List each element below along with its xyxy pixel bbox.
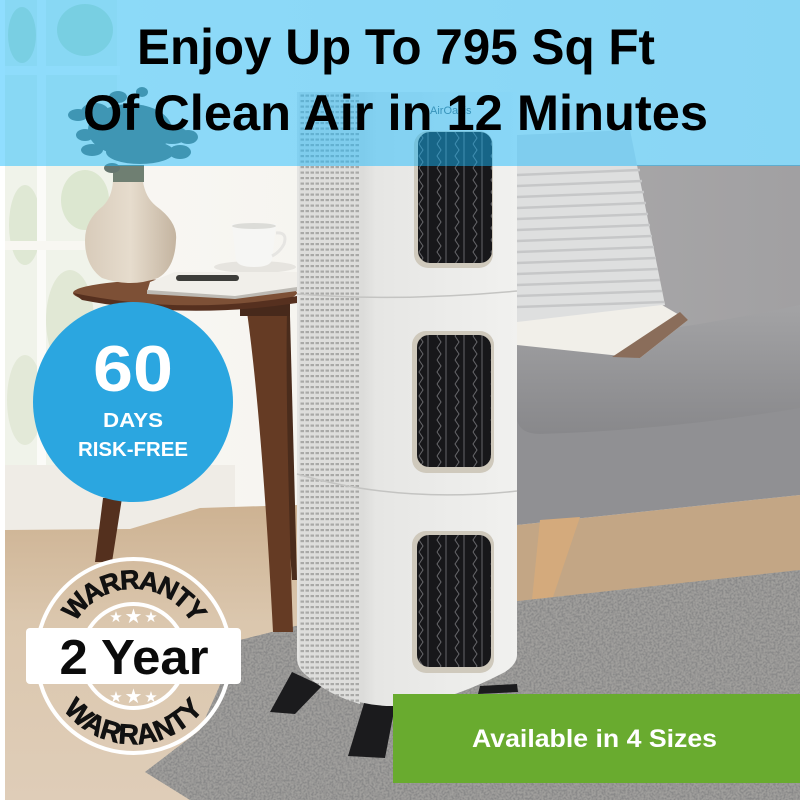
stars xyxy=(109,606,158,708)
stars: ★ xyxy=(109,609,123,626)
brand mark: AirOasis xyxy=(430,105,472,117)
title: Of Clean Air in 12 Minutes xyxy=(83,85,708,141)
book and pen xyxy=(147,272,297,299)
2 year label xyxy=(26,628,241,684)
baseboard xyxy=(5,465,235,530)
title: Enjoy Up To 795 Sq Ft xyxy=(137,19,655,75)
title xyxy=(83,19,708,141)
wooden leg xyxy=(532,517,580,600)
open magazine xyxy=(517,305,688,358)
side grille xyxy=(299,92,360,704)
eucalyptus leaves xyxy=(68,87,198,173)
top filter panel xyxy=(414,131,493,268)
side table xyxy=(73,279,297,632)
table legs xyxy=(274,316,297,580)
top banner xyxy=(0,0,800,166)
air purifier tower xyxy=(270,92,518,758)
sizes callout: Available in 4 Sizes xyxy=(472,725,717,753)
vase with leaves xyxy=(68,87,198,283)
curved warranty text, top: WARRANTY xyxy=(60,570,208,619)
badge: 2 year warranty xyxy=(26,557,241,755)
module seams xyxy=(297,291,517,297)
table top xyxy=(73,279,297,307)
badge: 60 days risk-free: 60 xyxy=(93,332,173,405)
stars: ★ xyxy=(144,609,158,626)
tower body xyxy=(297,92,517,706)
stars: ★ xyxy=(144,689,158,706)
badge: 60 days risk-free: DAYS xyxy=(103,410,163,432)
badge: 60 days risk-free xyxy=(33,302,233,502)
curved warranty text, bottom: WARRANTY xyxy=(66,696,200,745)
stars: ★ xyxy=(125,686,142,708)
coffee cup and saucer xyxy=(214,223,296,273)
grey rug xyxy=(145,570,800,800)
sofa xyxy=(517,130,800,600)
pillow xyxy=(517,130,665,330)
purifier feet xyxy=(270,672,518,758)
seat cushion xyxy=(517,305,800,434)
window with garden view xyxy=(5,0,120,470)
wood floor xyxy=(5,505,297,800)
badge: 60 days risk-free: RISK-FREE xyxy=(78,439,188,461)
stars: ★ xyxy=(109,689,123,706)
bottom filter panel xyxy=(412,531,494,673)
room background xyxy=(5,0,800,530)
stars: ★ xyxy=(125,606,142,628)
sofa base xyxy=(517,400,800,525)
middle filter panel xyxy=(412,331,494,473)
sizes callout xyxy=(393,694,800,783)
badge: 2 year warranty: 2 Year xyxy=(60,631,208,685)
